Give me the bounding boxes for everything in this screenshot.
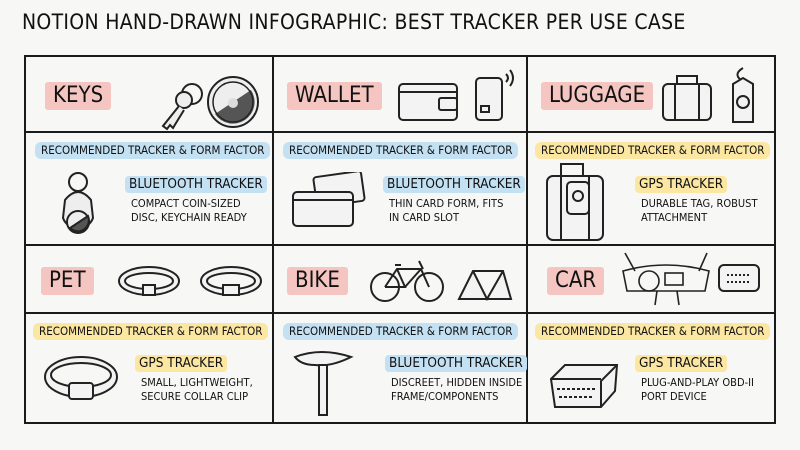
icon: suitcase xyxy=(662,75,712,121)
panel: car xyxy=(547,252,760,306)
text: RECOMMENDED TRACKER & FORM FACTOR xyxy=(39,324,262,338)
panel: keys tracker: RECOMMENDED TRACKER & FORM FACTOR xyxy=(41,143,264,157)
icon: obd device xyxy=(550,364,618,408)
text: RECOMMENDED TRACKER & FORM FACTOR xyxy=(289,324,512,338)
icon: bicycle xyxy=(370,260,444,302)
panel: luggage: LUGGAGE xyxy=(549,83,645,108)
text: GPS TRACKER xyxy=(139,355,223,371)
panel: keys tracker: DISC, KEYCHAIN READY xyxy=(131,211,247,224)
text: DURABLE TAG, ROBUST xyxy=(641,197,758,210)
text: BLUETOOTH TRACKER xyxy=(389,355,523,371)
icon: wallet xyxy=(398,83,458,121)
panel: keys tracker: BLUETOOTH TRACKER xyxy=(129,176,263,192)
icon: collar tracker xyxy=(44,356,118,400)
icon: saddle xyxy=(294,351,354,416)
icon: luggage with tag xyxy=(546,163,604,241)
icon: tag xyxy=(732,67,754,123)
icon: obd xyxy=(718,264,760,292)
panel: keys tracker xyxy=(35,142,270,234)
text: RECOMMENDED TRACKER & FORM FACTOR xyxy=(541,143,764,157)
panel: keys tracker: COMPACT COIN-SIZED xyxy=(131,197,241,210)
label keys: KEYS xyxy=(53,83,103,108)
panel: luggage xyxy=(541,67,754,123)
text: PORT DEVICE xyxy=(641,390,707,403)
panel: bike xyxy=(287,260,512,302)
icon: dashboard xyxy=(622,252,710,306)
text: GPS TRACKER xyxy=(639,355,723,371)
text: RECOMMENDED TRACKER & FORM FACTOR xyxy=(289,143,512,157)
text: FRAME/COMPONENTS xyxy=(391,390,498,403)
panel: pet xyxy=(41,266,262,296)
text: ATTACHMENT xyxy=(641,211,707,224)
icon: airtag keyring xyxy=(62,172,94,234)
text: SMALL, LIGHTWEIGHT, xyxy=(141,376,253,389)
panel: wallet: WALLET xyxy=(295,83,374,108)
text: SECURE COLLAR CLIP xyxy=(141,390,248,403)
title: NOTION HAND-DRAWN INFOGRAPHIC: BEST TRACKER PER USE CASE xyxy=(22,10,686,34)
label keys xyxy=(45,82,111,110)
panel: car: CAR xyxy=(555,268,596,293)
panel: bike: BIKE xyxy=(295,268,340,293)
panel: wallet xyxy=(287,69,514,121)
icon: key xyxy=(162,83,203,130)
icon: airtag xyxy=(207,76,259,128)
text: DISCREET, HIDDEN INSIDE xyxy=(391,376,522,389)
text: GPS TRACKER xyxy=(639,176,723,192)
text: PLUG-AND-PLAY OBD-II xyxy=(641,376,754,389)
text: IN CARD SLOT xyxy=(389,211,459,224)
panel: pet: PET xyxy=(49,268,86,293)
icon: card xyxy=(475,69,514,121)
text: RECOMMENDED TRACKER & FORM FACTOR xyxy=(541,324,764,338)
panel: keys xyxy=(45,76,259,130)
icon: collars xyxy=(118,266,262,296)
text: THIN CARD FORM, FITS xyxy=(389,197,503,210)
icon: wallet with card xyxy=(292,172,366,227)
text: BLUETOOTH TRACKER xyxy=(387,176,521,192)
icon: frame xyxy=(457,270,512,302)
